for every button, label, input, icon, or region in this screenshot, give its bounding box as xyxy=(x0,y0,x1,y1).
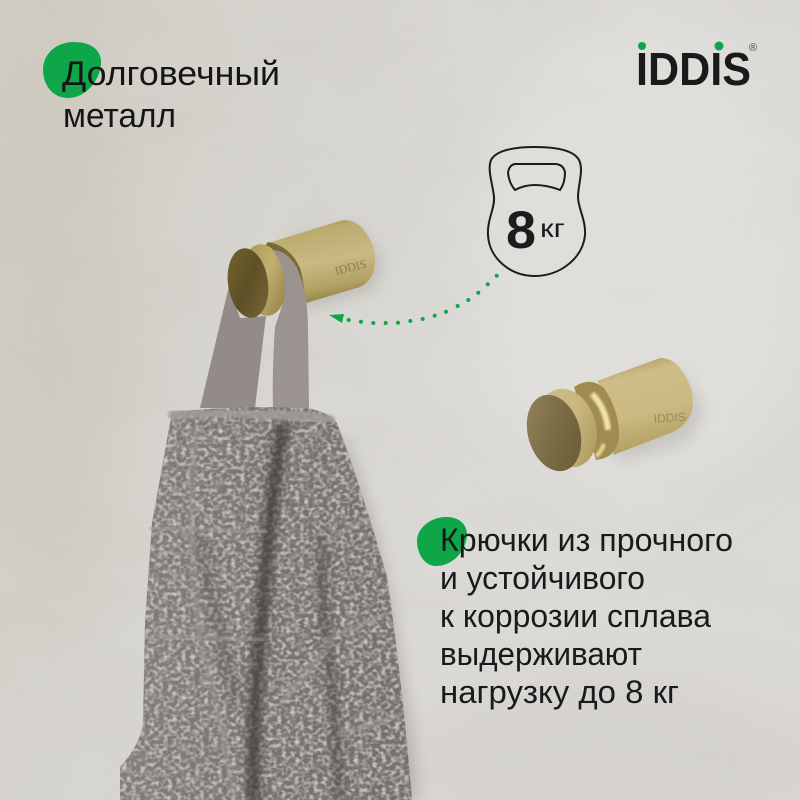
towel folds xyxy=(148,412,400,800)
hook 1 engraved brand: IDDIS xyxy=(333,257,368,278)
green blob behind description xyxy=(417,517,467,566)
kettlebell handle hole xyxy=(508,164,565,190)
title text: металл xyxy=(63,97,176,135)
icon: kettlebell 8 кг xyxy=(488,147,585,276)
hook 2 xyxy=(518,358,704,478)
title text: Долговечный xyxy=(62,55,280,93)
arrow: dotted green from weight to hook xyxy=(329,274,499,325)
description block xyxy=(417,517,733,710)
towel loop, front strand xyxy=(272,250,309,408)
towel xyxy=(120,407,418,800)
description text: нагрузку до 8 кг xyxy=(440,674,679,710)
description text: и устойчивого xyxy=(440,560,645,596)
logo: IDDIS xyxy=(636,42,757,95)
description text: выдерживают xyxy=(440,636,642,672)
towel loop, rear strand xyxy=(200,286,266,408)
kettlebell outline xyxy=(488,147,585,276)
hook 1 disc rim, behind loop xyxy=(237,241,291,319)
green blob behind title xyxy=(43,42,101,98)
hook 2 body cylinder xyxy=(597,358,693,455)
hook 2 disc face xyxy=(518,388,590,478)
title: Долговечный металл xyxy=(43,42,280,135)
hook 1 disc face xyxy=(223,246,273,320)
logo registered mark: ® xyxy=(749,42,757,54)
towel main body xyxy=(120,407,412,800)
hook 2 engraved brand: IDDIS xyxy=(653,410,686,426)
hook 2 polished neck xyxy=(574,382,619,460)
description text: к коррозии сплава xyxy=(440,598,711,634)
hook 1 neck xyxy=(262,242,304,303)
logo wordmark: IDDIS xyxy=(636,43,751,95)
logo green dots xyxy=(638,42,724,50)
description text: Крючки из прочного xyxy=(440,522,733,558)
hook 2 disc rim xyxy=(528,382,606,474)
weight number: 8 xyxy=(506,201,536,260)
hook 1 with hanging loop xyxy=(200,220,384,408)
weight unit: кг xyxy=(540,215,565,243)
hook 1 body cylinder xyxy=(268,220,375,303)
